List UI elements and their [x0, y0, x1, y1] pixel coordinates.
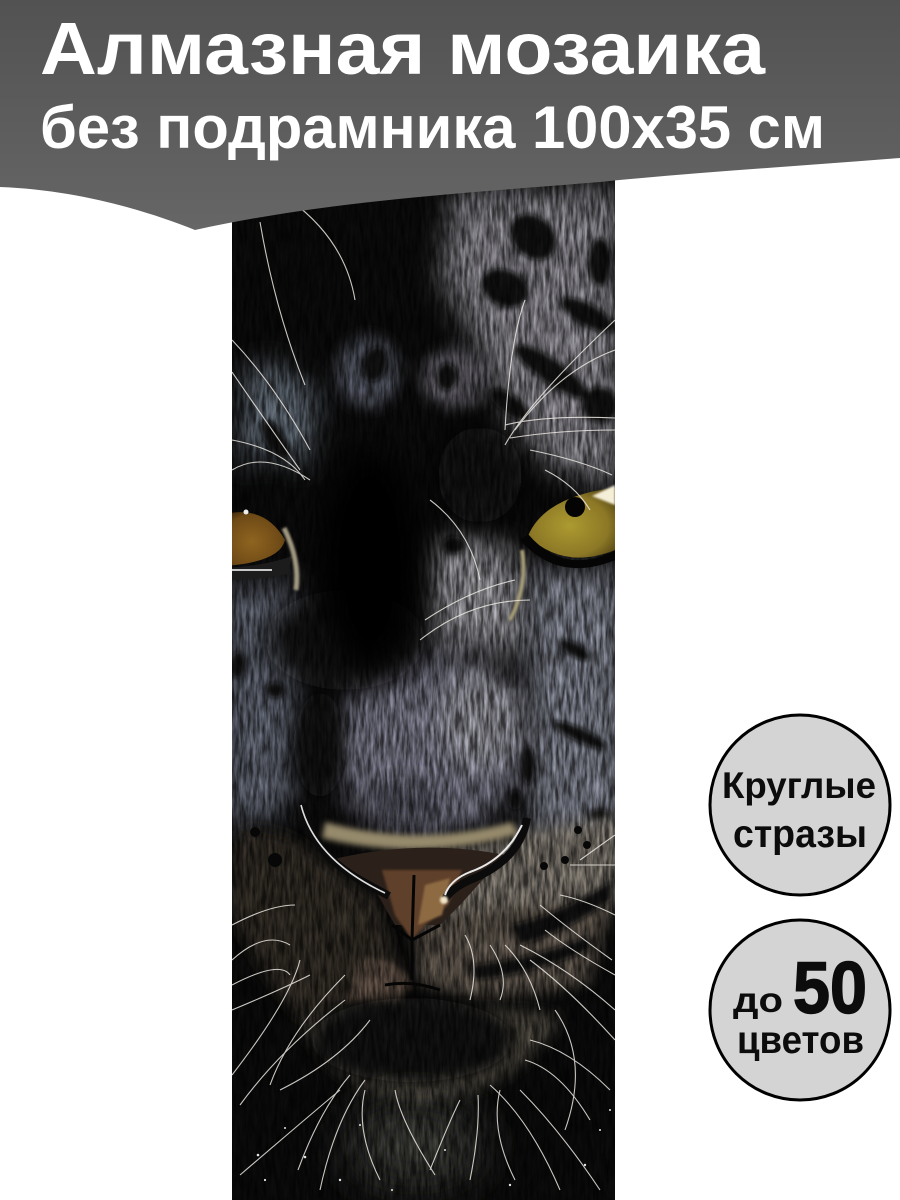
title — [40, 7, 825, 161]
whisker spots — [250, 826, 591, 870]
badge text: Круглые: Круглые — [722, 765, 876, 806]
badge: up to 50 colours — [710, 920, 890, 1100]
fur texture — [232, 170, 615, 1200]
panther portrait panel — [225, 170, 625, 1200]
title line 2: без подрамника 100х35 см — [40, 94, 825, 161]
badge text: стразы: стразы — [733, 813, 867, 856]
badge: round rhinestones — [710, 715, 890, 895]
title line 1: Алмазная мозаика — [40, 7, 766, 90]
badge text: до: до — [733, 981, 783, 1020]
fur masses — [225, 190, 625, 850]
dark fur between brow and right eye — [438, 427, 522, 523]
whiskers — [232, 200, 615, 1190]
dark spots and stripes — [230, 204, 619, 821]
lower cheeks, lips and chin — [225, 815, 620, 1185]
black centre of the forehead — [318, 450, 422, 670]
badge text: 50: 50 — [793, 948, 867, 1029]
speckles — [257, 1109, 611, 1191]
badge text: цветов: цветов — [737, 1019, 864, 1062]
right eye — [510, 485, 620, 620]
grey title banner — [0, 0, 900, 230]
left eye — [225, 510, 297, 590]
nose — [301, 803, 527, 990]
muzzle — [265, 590, 526, 835]
